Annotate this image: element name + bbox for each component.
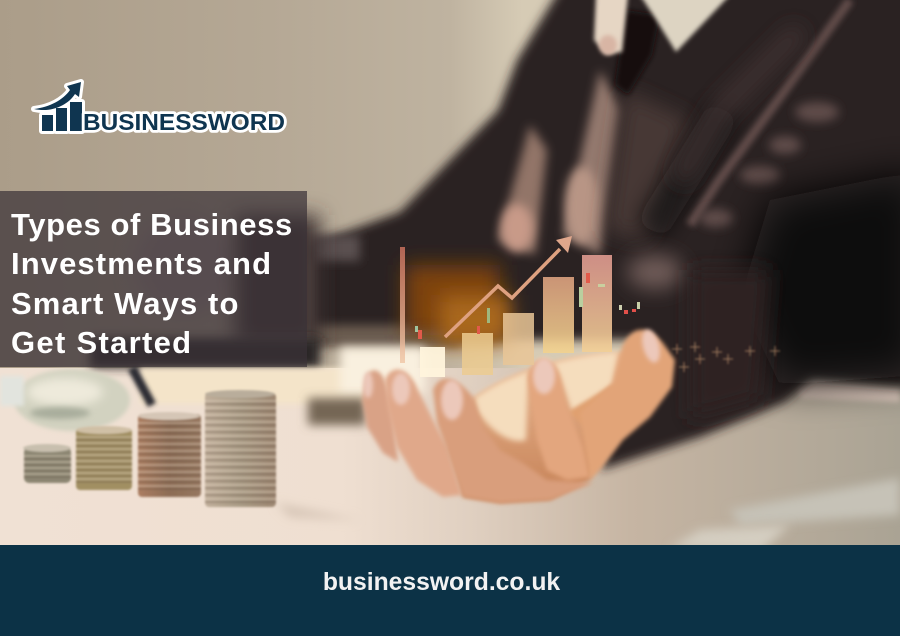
title text: Investments and [11,246,272,281]
blurred jacket and arm [310,0,900,470]
chart axis [400,247,405,363]
bright desk strip and notebook [140,347,425,425]
fingernails [363,328,663,420]
footer band [0,545,900,636]
chart bars [420,347,445,377]
title text: Get Started [11,325,192,360]
coin shadow [276,503,360,520]
title text: Smart Ways to [11,286,240,321]
chart hologram [400,236,780,377]
logo [31,79,287,135]
palm [450,352,625,503]
logo bars and arrow [34,82,82,131]
title text: Types of Business [11,207,293,242]
logo wordmark: BUSINESSWORD [83,109,285,135]
sparkle points [672,342,780,372]
blurred far hand behind title [90,215,320,368]
fingers [362,370,398,462]
footer url: businessword.co.uk [323,569,560,596]
title text [11,207,293,360]
hand [362,328,675,503]
candlestick marks [415,273,640,339]
title panel [0,191,307,367]
magnifying glass [0,368,152,431]
chart arrow [445,249,560,337]
coin stacks [23,390,276,507]
wall [0,0,900,420]
table surface [0,368,900,552]
